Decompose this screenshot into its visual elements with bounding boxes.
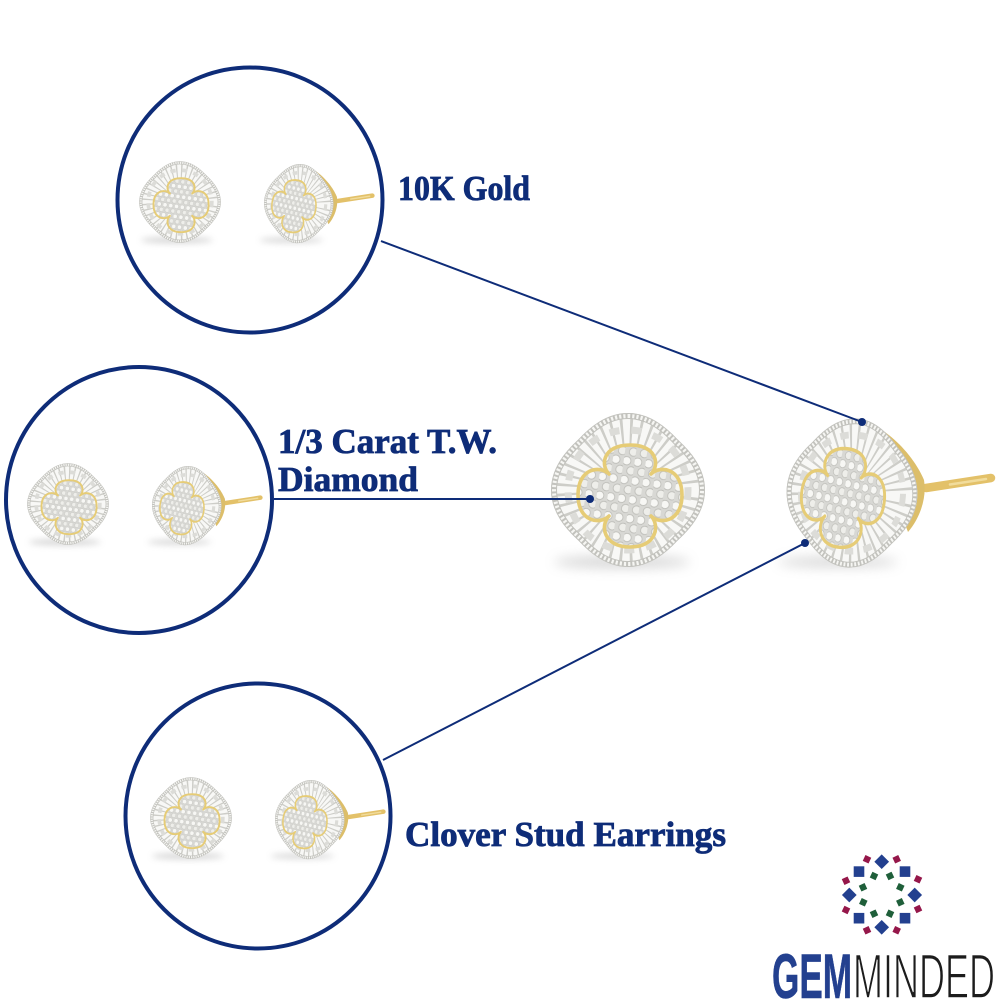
- panel: diamond circle: [6, 367, 272, 633]
- earrings in middle circle: [27, 463, 260, 547]
- heading: Clover Stud Earrings: Clover Stud Earrings: [405, 815, 726, 854]
- arrow: gold pointer: [381, 241, 866, 426]
- logo wordmark: GEM MINDED: [772, 942, 995, 1000]
- heading: 1/3 Carat T.W. Diamond: [278, 422, 497, 499]
- earrings in bottom circle: [150, 777, 383, 861]
- heading: 10K Gold: 10K Gold: [398, 169, 530, 208]
- panel: clover circle: [126, 684, 390, 948]
- arrow: clover pointer: [383, 539, 809, 760]
- heading: 1/3 Carat T.W. Diamond: Diamond: [278, 460, 419, 499]
- earrings in top circle: [139, 161, 372, 245]
- panel: 10K gold circle: [118, 68, 382, 332]
- main earrings: [551, 413, 991, 572]
- icon: Gem Minded logo mark: [842, 854, 922, 935]
- arrow: diamond pointer: [274, 495, 594, 503]
- heading: 1/3 Carat T.W. Diamond: 1/3 Carat T.W.: [278, 422, 497, 461]
